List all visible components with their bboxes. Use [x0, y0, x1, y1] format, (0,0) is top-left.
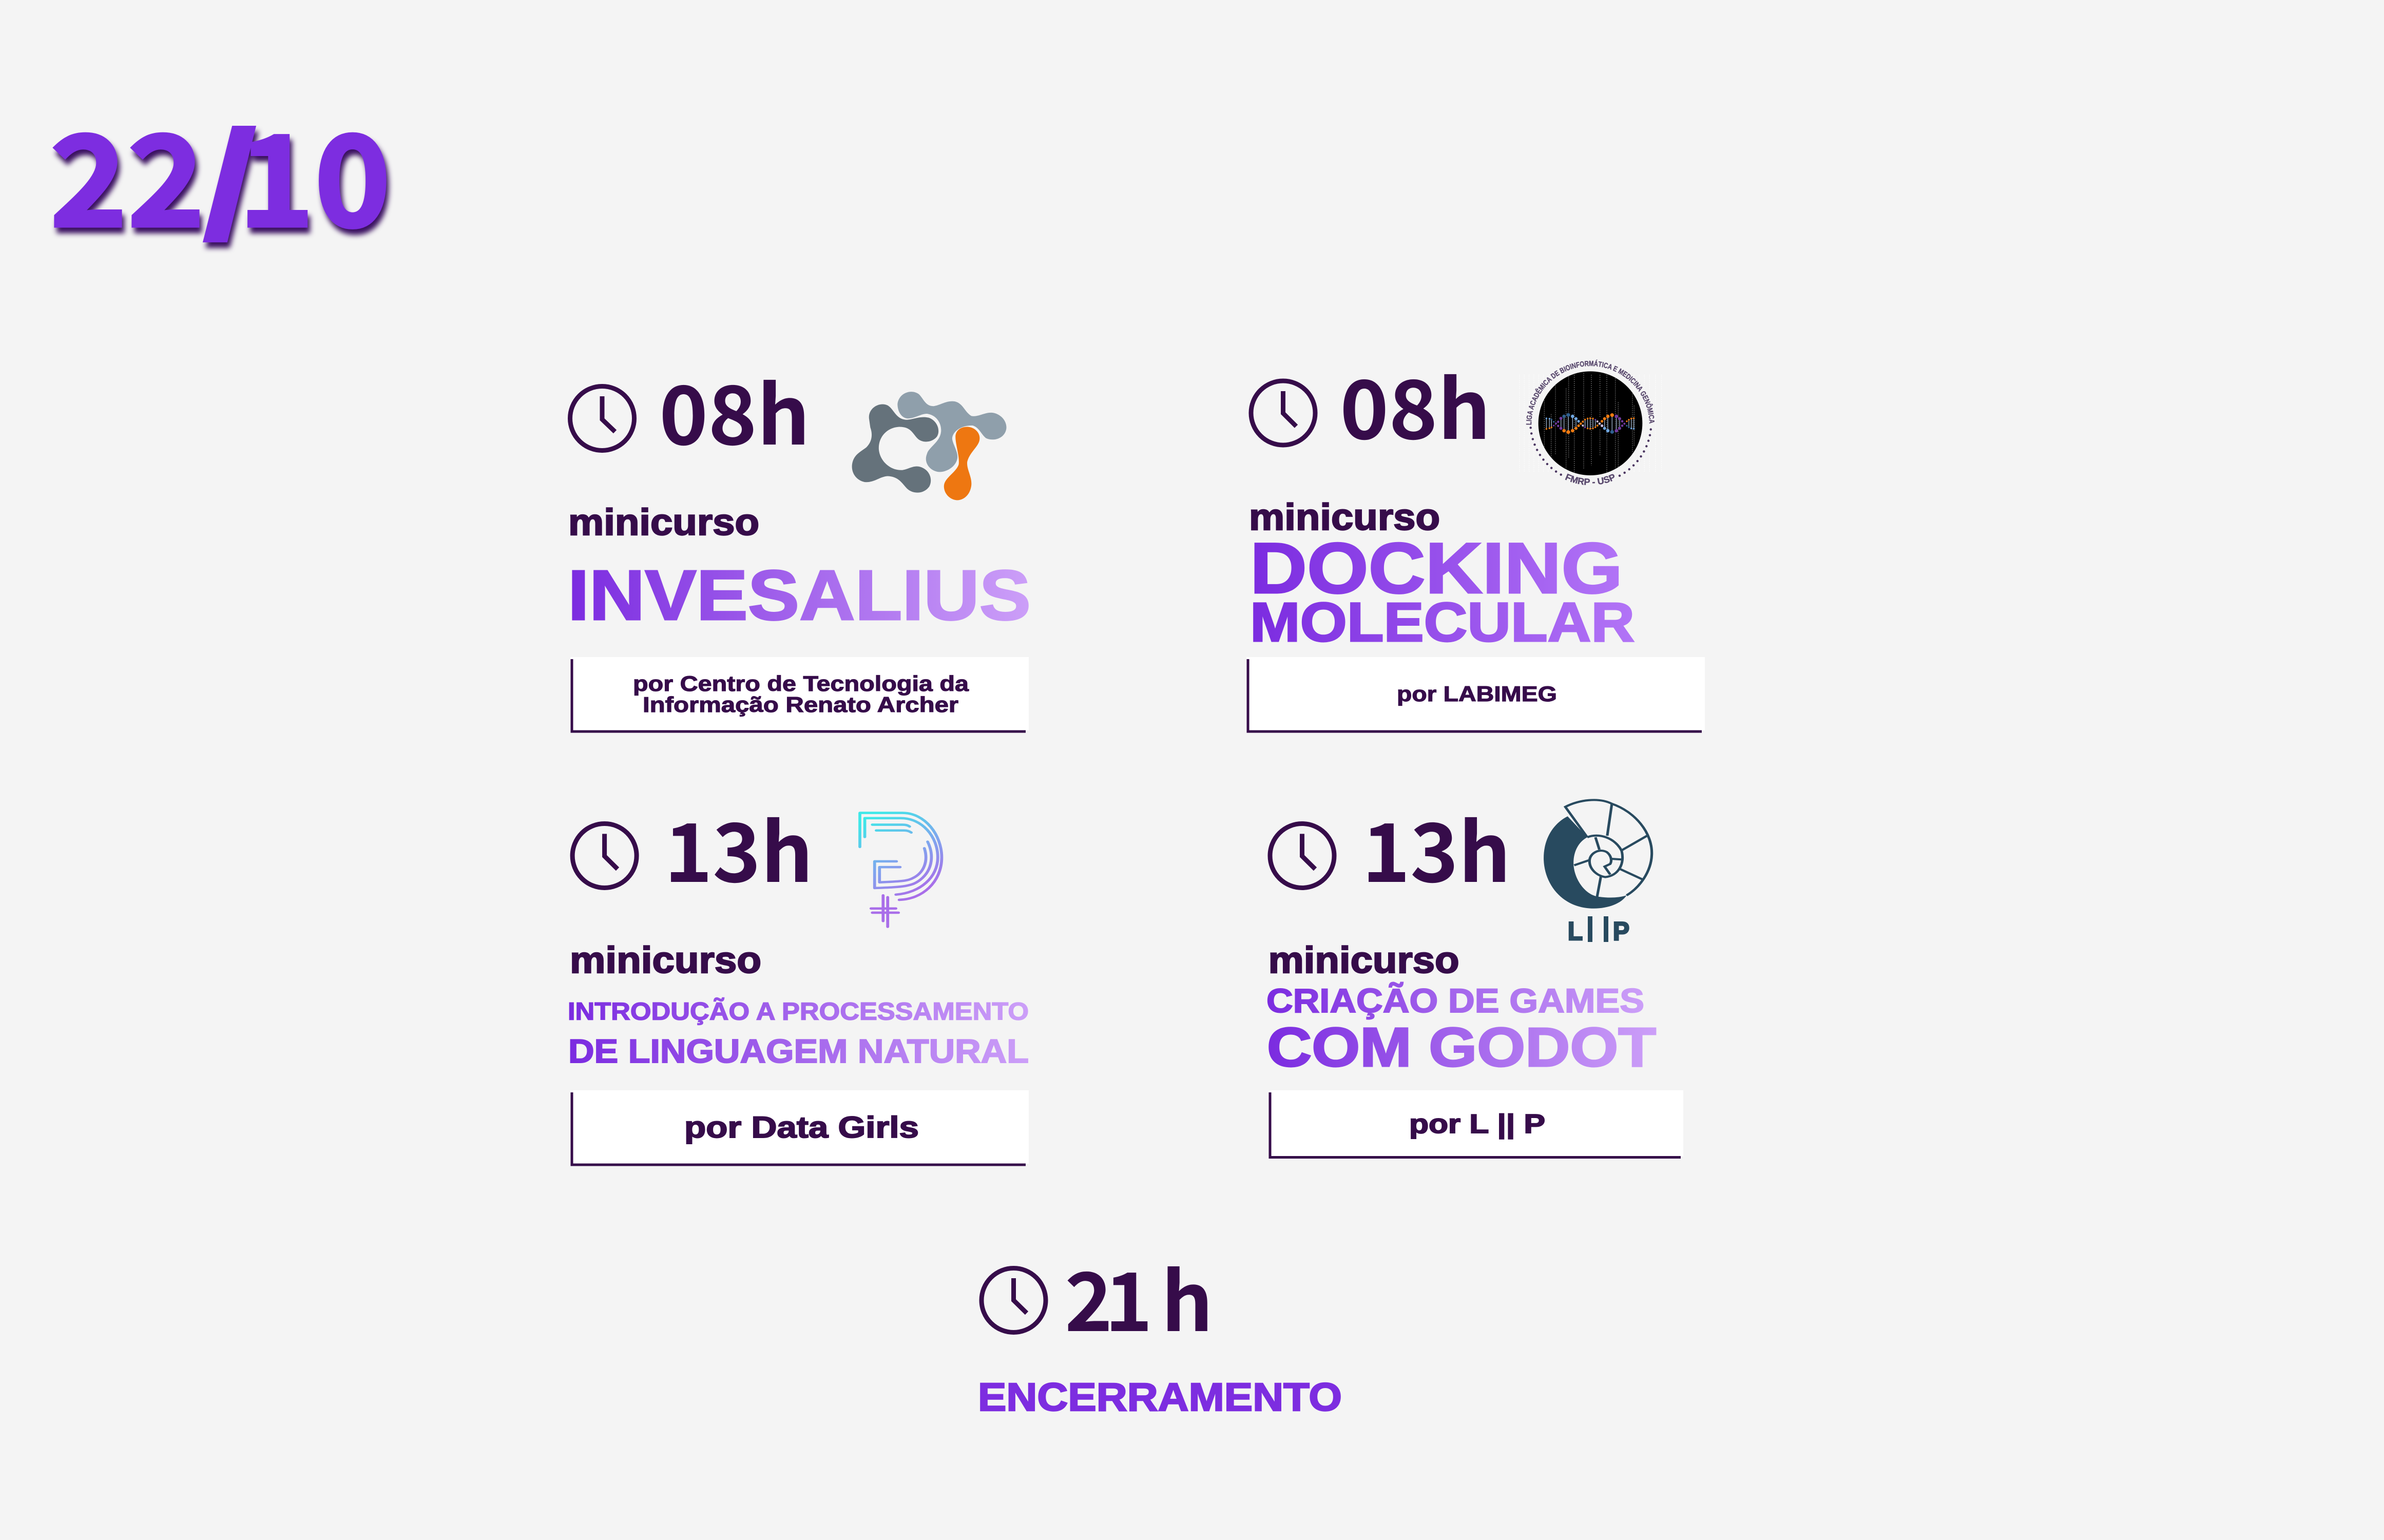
logo: Liga Acadêmica FMRP-USP: FMRP - USP: [1565, 473, 1614, 485]
panel: 21h closing: [978, 1237, 1342, 1419]
time: 13h: 13h: [664, 788, 813, 906]
title: date 22/10: 22: [50, 80, 205, 263]
icon: clock: [1251, 381, 1315, 445]
box: presenter: por L || P: [1409, 1109, 1545, 1139]
logo: L||P shell: [1544, 800, 1652, 946]
title: date 22/10: [50, 80, 391, 273]
logo: Data Girls: [860, 813, 941, 927]
heading: DOCKING: DOCKING: [1250, 528, 1623, 608]
heading: Criação de Games: CRIAÇÃO DE GAMES: [1266, 981, 1644, 1019]
logo: L||P shell: L: [1568, 917, 1583, 946]
box: presenter: Informação Renato Archer: [643, 692, 958, 717]
box: presenter: por Centro de Tecnologia da: [633, 671, 969, 696]
panel: 13h Processamento de Linguagem Natural: [568, 788, 1029, 1165]
label: minicurso: minicurso: [1249, 497, 1440, 538]
panel: 08h Docking Molecular: [1246, 345, 1705, 733]
logo: CTI molecule: [852, 392, 1006, 500]
heading: Introdução a Processamento: INTRODUÇÃO A PROCESSAMENTO: [568, 997, 1029, 1026]
title: date 22/10: /: [201, 98, 259, 273]
heading: Encerramento: ENCERRAMENTO: [978, 1375, 1342, 1419]
title: date 22/10: 10: [238, 80, 391, 263]
box: presenter: [570, 1090, 1029, 1165]
box: presenter: por Data Girls: [684, 1111, 919, 1144]
heading: Com Godot: COM GODOT: [1267, 1016, 1656, 1078]
label: minicurso: minicurso: [1268, 940, 1459, 981]
heading: de Linguagem Natural: DE LINGUAGEM NATURAL: [568, 1032, 1029, 1070]
logo: Liga Acadêmica FMRP-USP: LIGA ACADÊMICA DE BIOINFORMÁTICA E MEDICINA GENÔMICA: [1526, 359, 1655, 425]
logo: L||P shell: P: [1613, 917, 1629, 946]
time: 13h: 13h: [1362, 788, 1511, 906]
label: minicurso: minicurso: [568, 502, 759, 543]
icon: clock: [572, 823, 637, 888]
label: minicurso: minicurso: [570, 940, 761, 981]
box: presenter: [1268, 1090, 1683, 1157]
panel: 13h Criação de Games com Godot: [1266, 788, 1683, 1157]
box: presenter: [570, 657, 1029, 732]
logo: Liga Acadêmica FMRP-USP: [1520, 359, 1662, 485]
panel: 08h InVesalius: [568, 351, 1031, 732]
icon: clock: [570, 386, 635, 451]
icon: clock: [1270, 823, 1334, 888]
time: 08h: 08h: [1340, 345, 1491, 463]
time: 08h: 08h: [659, 351, 810, 468]
heading: MOLECULAR: MOLECULAR: [1250, 591, 1635, 653]
box: presenter: por LABIMEG: [1397, 682, 1557, 706]
time: 21h: 21h: [1065, 1237, 1213, 1355]
icon: clock: [982, 1268, 1046, 1333]
heading: INVESALIUS: INVESALIUS: [568, 556, 1031, 635]
box: presenter: [1246, 657, 1705, 732]
